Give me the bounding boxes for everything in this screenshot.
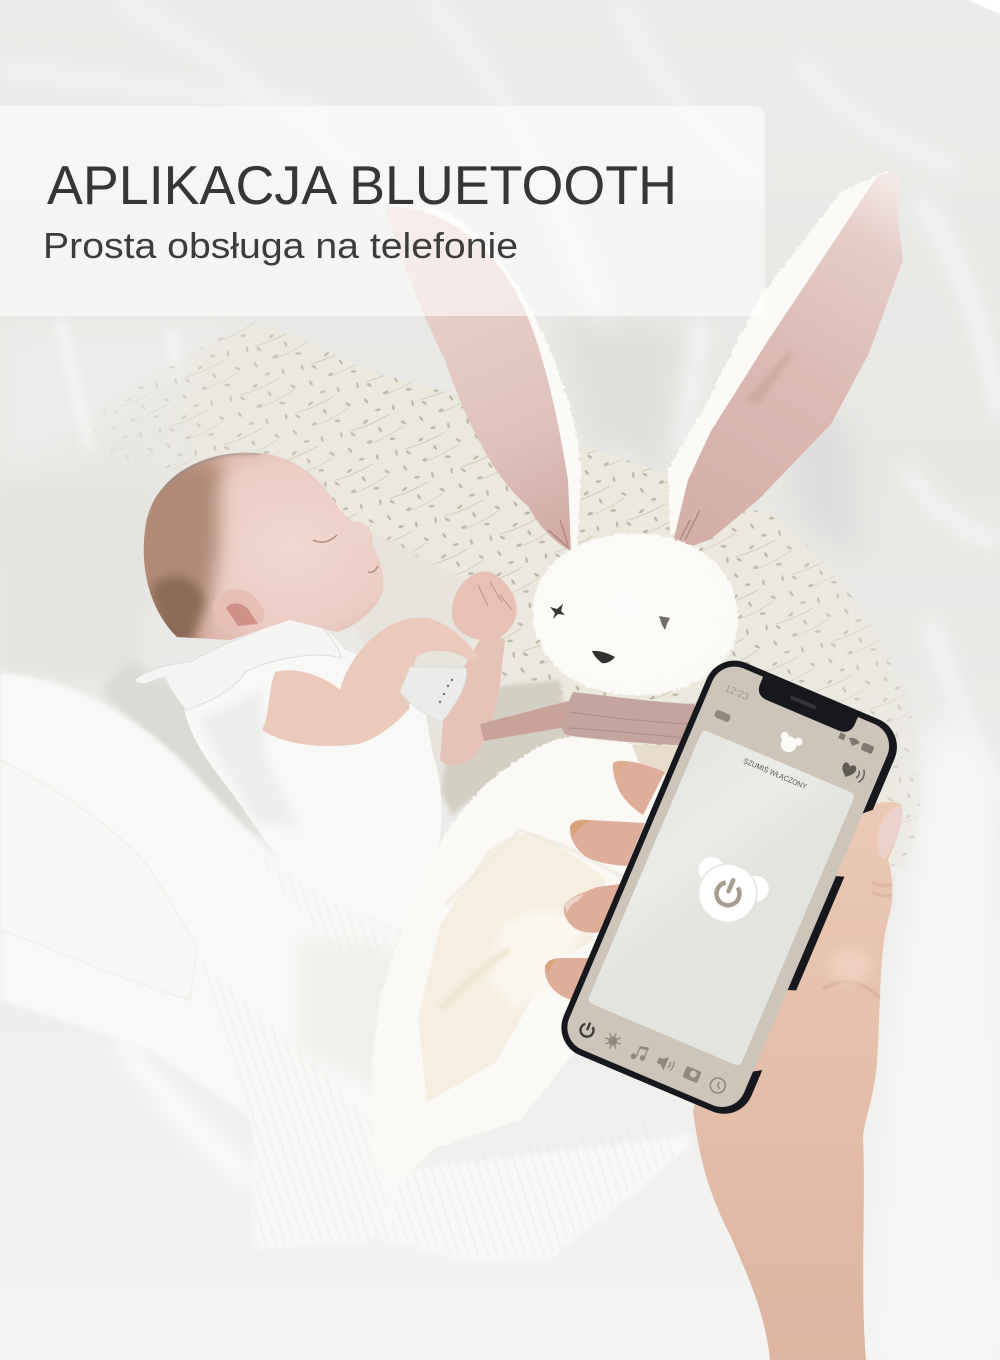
bear logo	[776, 731, 804, 756]
fur strip shading	[445, 830, 623, 905]
baby	[130, 452, 517, 930]
closed eye and mouth	[313, 535, 378, 572]
connection heart icon	[839, 761, 866, 783]
heading: APLIKACJA BLUETOOTH	[47, 154, 677, 216]
bunny right ear	[668, 171, 903, 553]
bunny head	[533, 533, 738, 695]
bunny eyes and nose	[550, 604, 670, 663]
baby head	[144, 452, 384, 640]
power icon	[578, 1020, 596, 1039]
bear power button	[682, 852, 773, 934]
baby near arm	[262, 618, 478, 746]
sleeve with eyelet embroidery	[400, 667, 467, 722]
timer icon	[708, 1076, 728, 1095]
cream inner fold	[418, 834, 606, 1102]
scarf band	[560, 692, 695, 746]
onesie frill collar	[134, 615, 342, 710]
muslin blanket bottom left	[0, 673, 690, 1262]
music icon	[630, 1042, 650, 1063]
thumb nail	[878, 805, 902, 859]
volume icon	[655, 1054, 676, 1073]
sheet shadows around the baby	[0, 486, 570, 840]
plush bunny	[372, 171, 903, 1178]
battery indicator	[714, 709, 731, 723]
palm and thumb overlapping the phone edge	[750, 805, 902, 1072]
speaker	[790, 695, 817, 710]
finger nails	[545, 761, 628, 975]
fingers	[545, 761, 665, 1000]
status label: SZUMIŚ WŁĄCZONY	[742, 756, 808, 791]
screen background	[560, 659, 897, 1114]
status time: 12:23	[723, 683, 751, 703]
phone body	[552, 651, 906, 1123]
bunny blanket body	[372, 737, 680, 1178]
forearm and palm	[693, 802, 902, 1360]
bunny left ear	[385, 205, 581, 551]
title panel	[0, 106, 765, 316]
status icons	[837, 732, 875, 754]
scarf tail	[480, 700, 572, 741]
brightness icon	[602, 1030, 624, 1052]
night icon	[682, 1066, 702, 1083]
baby hair	[144, 452, 262, 638]
baby far arm and fist	[440, 572, 517, 765]
light content panel	[587, 729, 856, 1067]
cream corner by the scarf	[632, 745, 680, 775]
white fur outer	[372, 737, 680, 1178]
patterned pillow under the baby	[55, 322, 920, 880]
smartphone screen with the app	[560, 658, 897, 1114]
baby ear	[213, 589, 264, 628]
bottom navigation icons	[578, 1020, 728, 1097]
notch	[755, 676, 858, 735]
bunny scarf	[480, 692, 695, 746]
onesie	[184, 615, 442, 930]
hand holding the phone	[545, 761, 902, 1360]
knuckle creases and palm highlight	[822, 882, 892, 998]
subheading: Prosta obsługa na telefonie	[43, 225, 518, 266]
